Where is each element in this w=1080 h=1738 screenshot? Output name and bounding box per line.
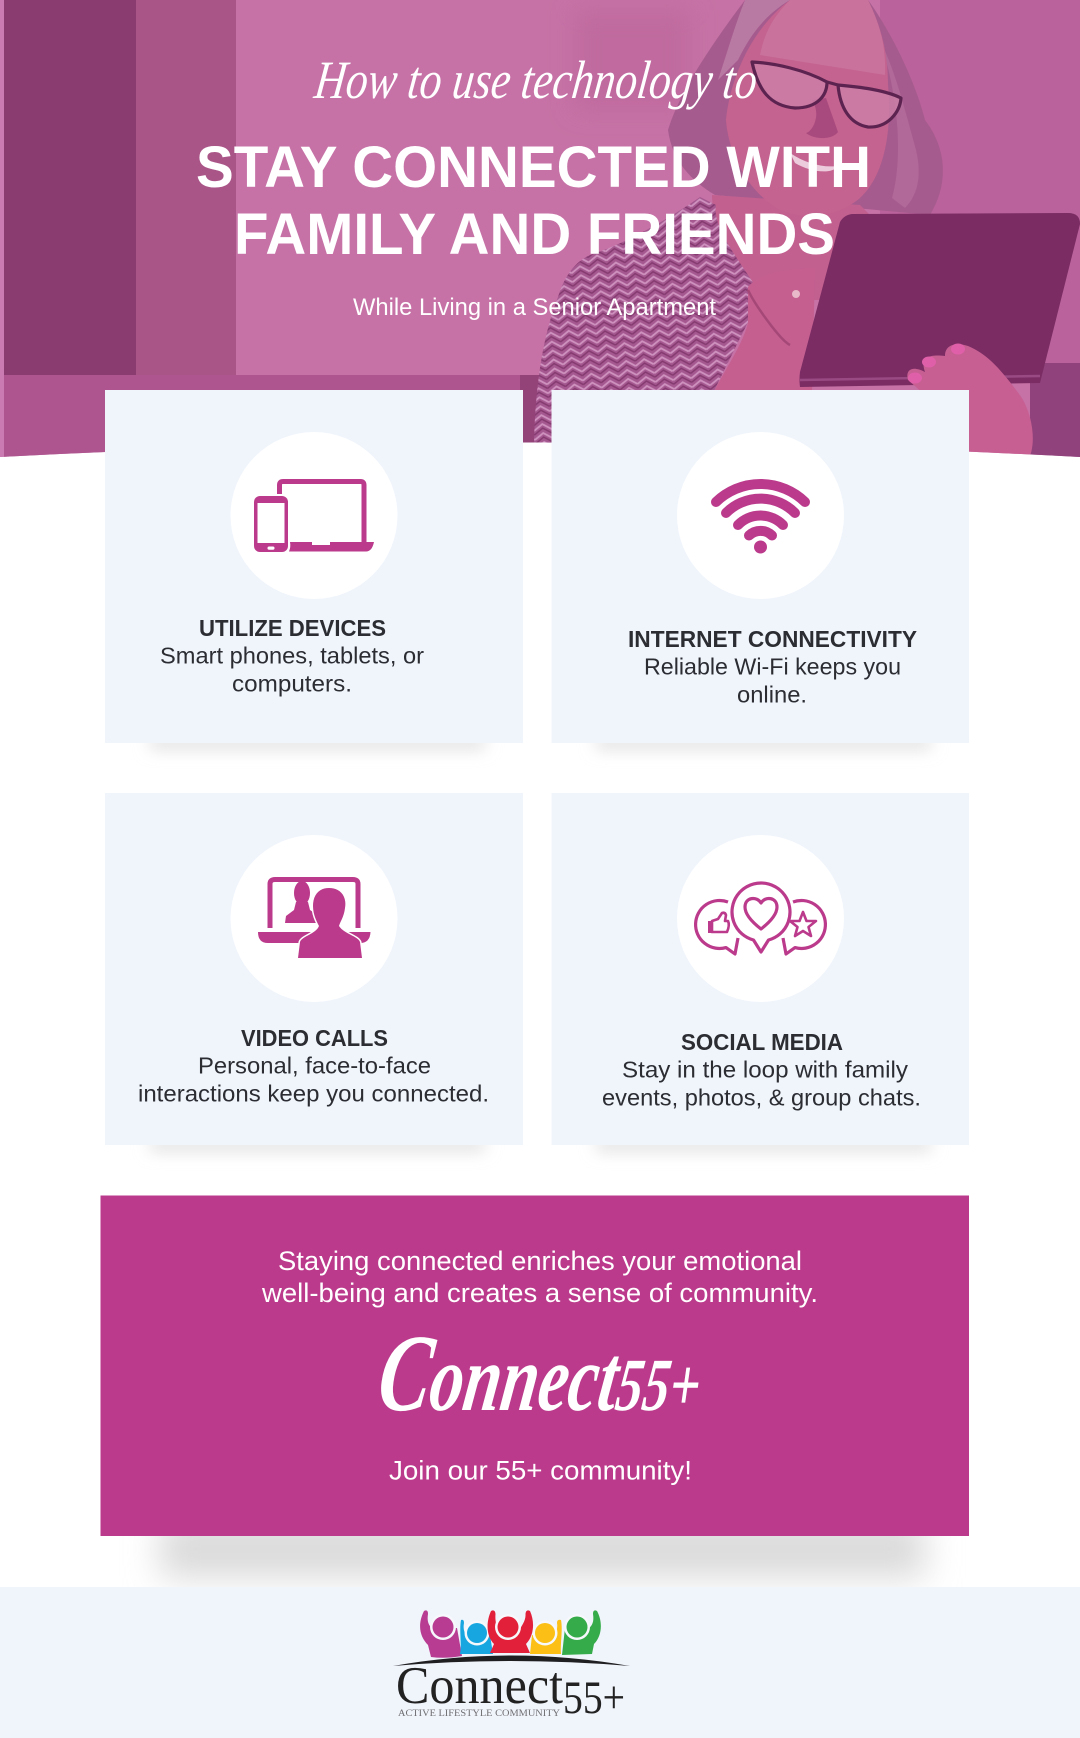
card heading: UTILIZE DEVICES [199,615,386,641]
nose [806,98,838,138]
card text: online. [737,682,807,708]
card text [644,654,901,708]
panel: internet connectivity [552,390,969,749]
card text: Personal, face-to-face [198,1052,431,1078]
main heading: STAY CONNECTED WITH [196,135,871,200]
hand on chest [715,282,814,390]
logo swoosh [393,1656,630,1666]
brand script: Connect55+ [372,1311,711,1434]
panel: utilize devices [105,390,523,749]
card text [160,642,424,696]
mouth [792,154,834,172]
logo figures [420,1610,601,1658]
face [726,0,889,216]
card text: computers. [232,670,352,696]
card heading: INTERNET CONNECTIVITY [628,626,917,652]
card text: interactions keep you connected. [138,1080,489,1106]
footer band [0,1587,1080,1738]
logo [393,1610,630,1724]
main heading [196,135,871,267]
hero photo background [0,0,1080,463]
card text: Smart phones, tablets, or [160,642,424,668]
title script line: How to use technology to [311,50,761,110]
cta text [261,1246,818,1308]
hand holding tablet [907,344,1033,460]
logo wordmark: Connect [396,1657,563,1715]
neck and chest [712,195,880,300]
card text: events, photos, & group chats. [602,1084,921,1110]
hair [668,0,943,215]
glasses [752,62,901,127]
card text [602,1056,921,1110]
logo wordmark: ACTIVE LIFESTYLE COMMUNITY [398,1709,560,1719]
tablet [800,213,1080,387]
shirt [534,197,756,460]
subtitle: While Living in a Senior Apartment [353,294,716,321]
logo wordmark [396,1657,625,1724]
icon: social bubbles [696,883,825,954]
icon: devices [254,482,374,552]
panel: video calls [105,793,523,1151]
join line: Join our 55+ community! [389,1456,692,1486]
card heading: VIDEO CALLS [241,1025,388,1051]
card text [138,1052,489,1106]
banner shadow [160,1520,925,1578]
icon: wifi [716,484,805,554]
card text: Reliable Wi-Fi keeps you [644,654,901,680]
cta text: well-being and creates a sense of community. [261,1278,818,1308]
card heading: SOCIAL MEDIA [681,1029,843,1055]
icon: video call [258,880,370,958]
panel: social media [552,793,969,1151]
panel: call to action [100,1196,969,1536]
main heading: FAMILY AND FRIENDS [234,202,835,267]
card text: Stay in the loop with family [622,1056,908,1082]
cta text: Staying connected enriches your emotional [278,1246,802,1276]
logo wordmark: 55+ [563,1672,625,1724]
